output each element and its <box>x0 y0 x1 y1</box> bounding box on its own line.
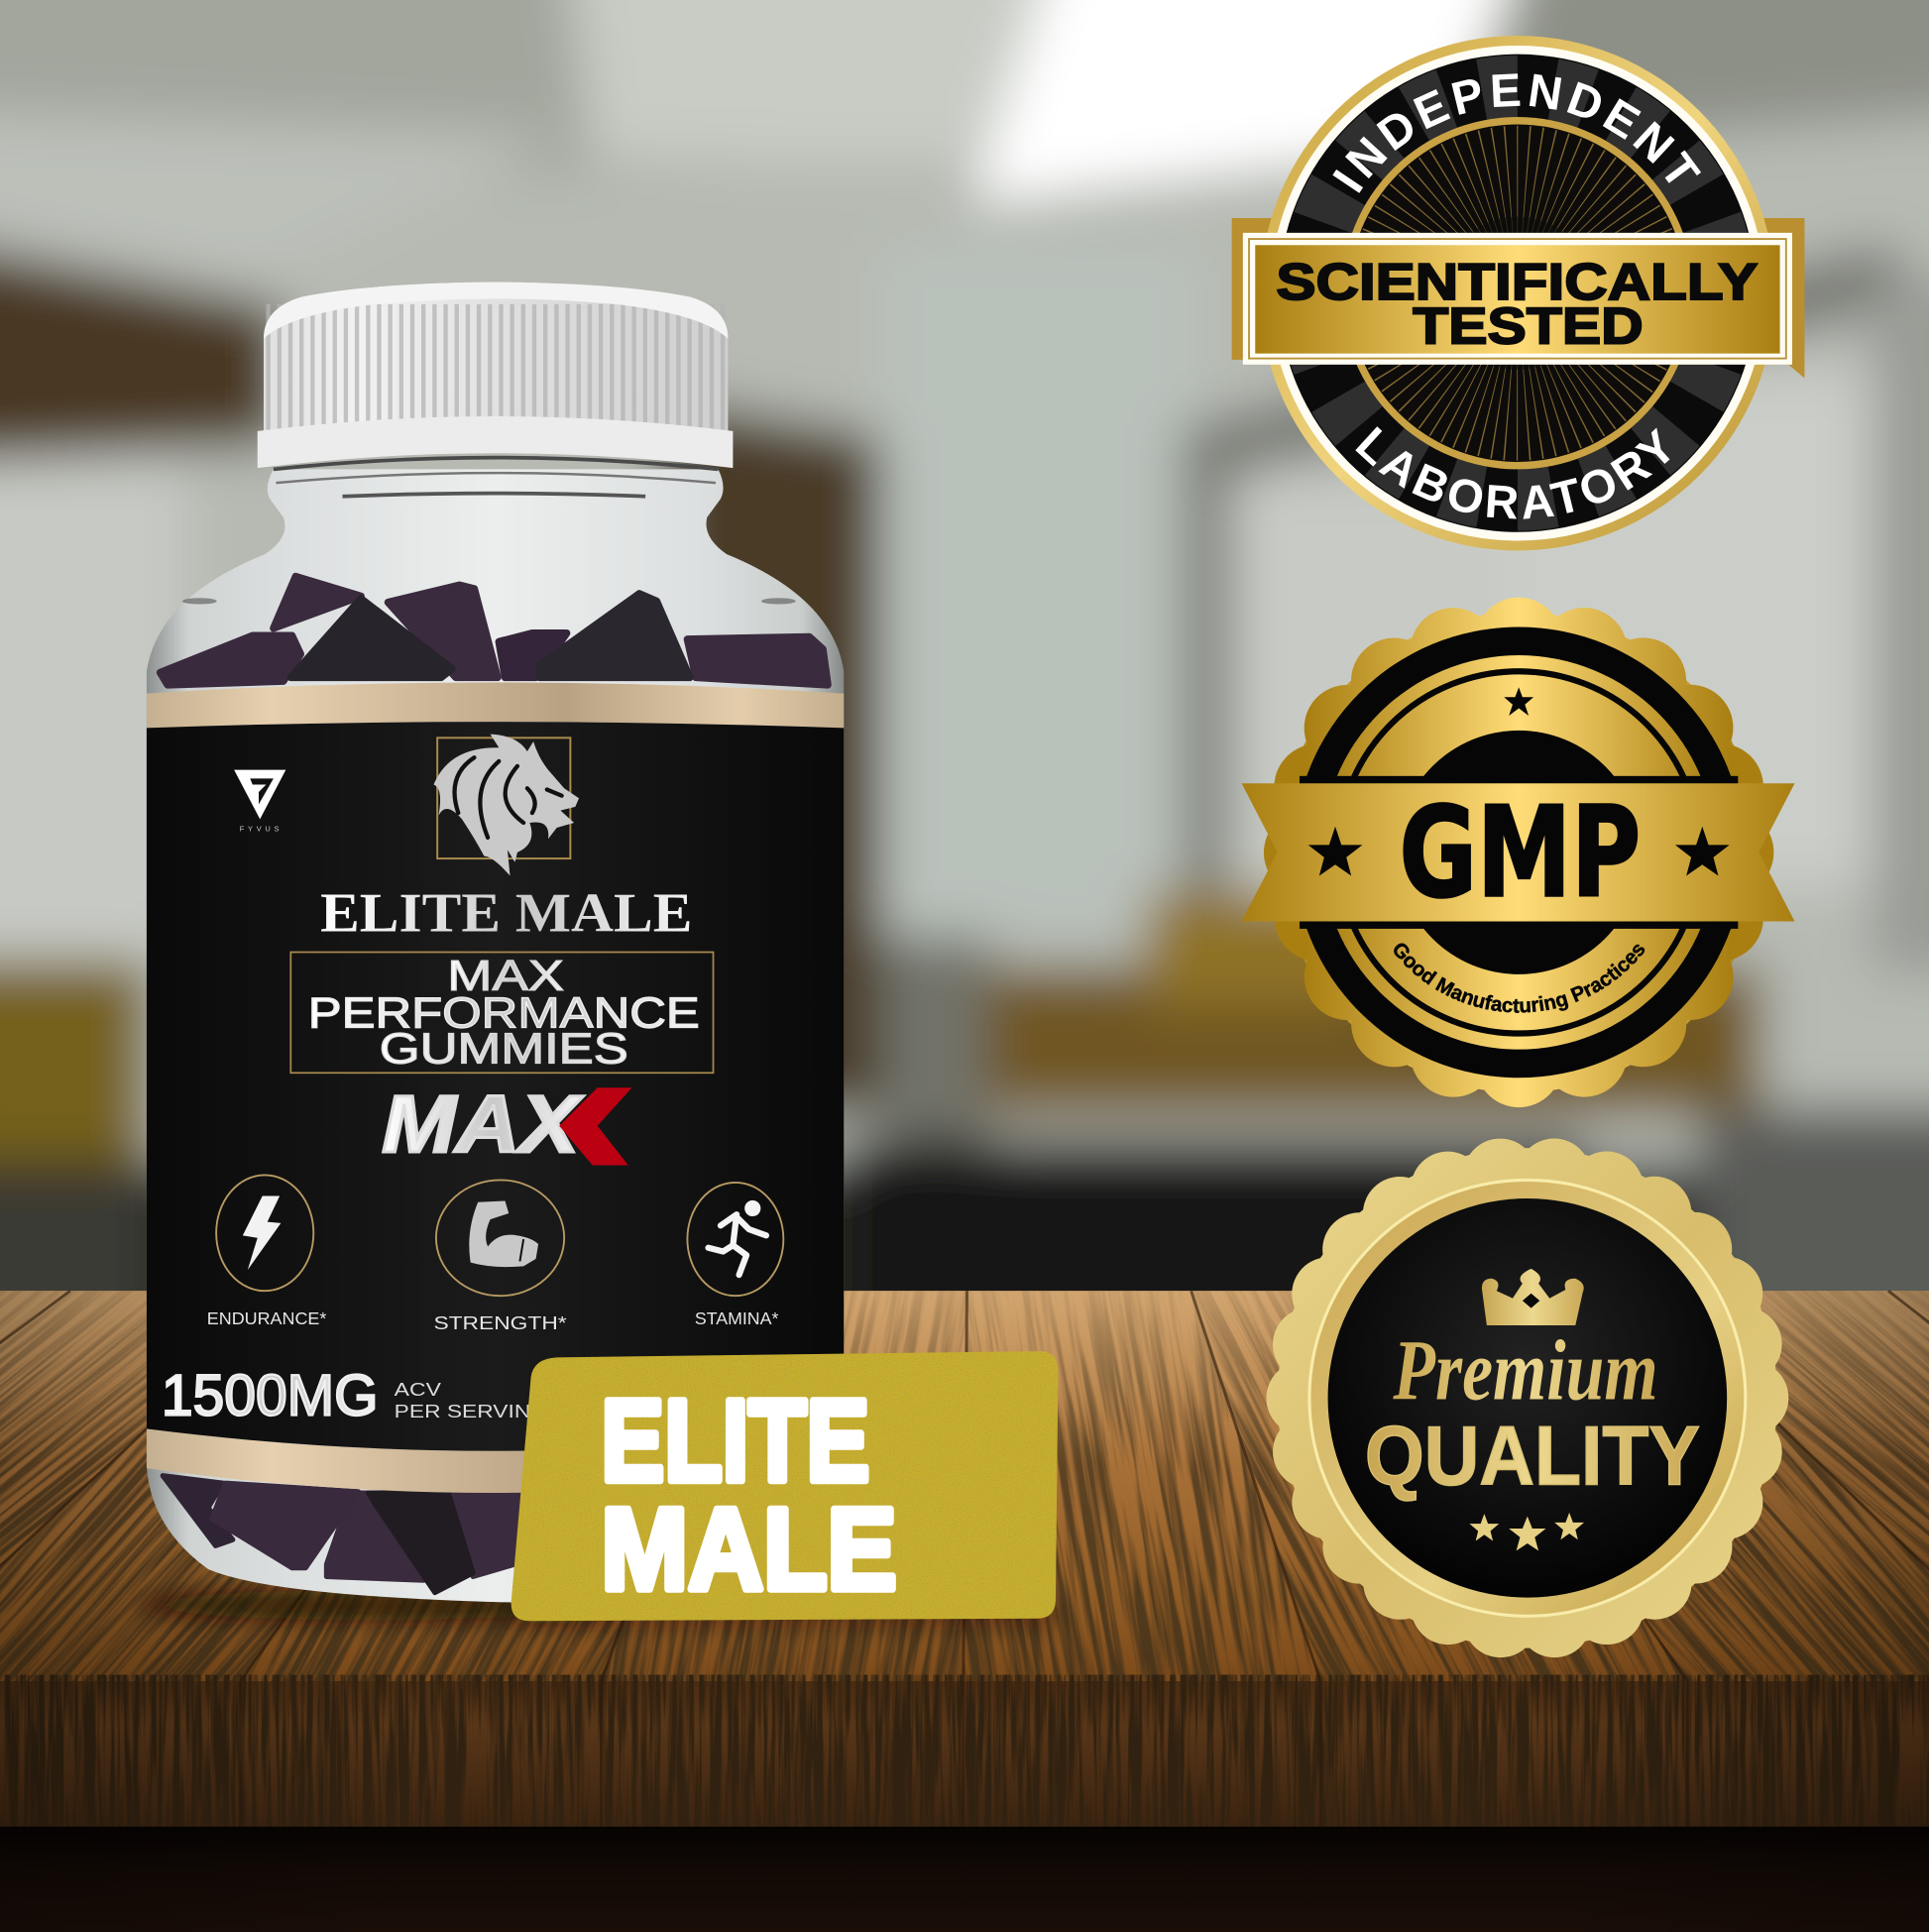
Premium script: Premium <box>1393 1322 1658 1419</box>
table front edge <box>0 1681 1929 1827</box>
GMP text: GMP <box>1400 780 1641 925</box>
QUALITY: QUALITY <box>1365 1409 1700 1502</box>
dosage detail: PER SERVING <box>395 1401 548 1421</box>
product subtitle box: PERFORMANCE <box>308 989 700 1037</box>
icon: strength <box>436 1180 564 1296</box>
inner sunburst <box>1341 117 1694 469</box>
cap band <box>258 416 733 468</box>
black label <box>147 722 844 1451</box>
scalloped seal <box>1278 1148 1777 1648</box>
product name: ELITE MALE <box>320 882 692 944</box>
cap ribs <box>266 316 727 417</box>
cap dome <box>264 283 728 339</box>
blurred room background <box>0 0 1929 1361</box>
label: endurance: ENDURANCE* <box>207 1308 327 1328</box>
wood grain on planks <box>0 1291 1929 1681</box>
INDEPENDENT arc text: INDEPENDENT <box>1332 73 1701 193</box>
icon: endurance <box>216 1175 313 1291</box>
neck rings <box>274 458 718 497</box>
dosage detail <box>395 1379 548 1421</box>
table top planks <box>0 1291 1929 1681</box>
banner tails <box>1232 218 1804 378</box>
gold tag: Elite Male: MALE <box>601 1484 897 1614</box>
scalloped seal <box>1279 613 1759 1092</box>
icon: FYVUS logo: FYVUS <box>240 825 283 834</box>
label: stamina: STAMINA* <box>695 1308 779 1328</box>
badge: premium quality <box>1278 1148 1777 1648</box>
icon: lion logo <box>433 735 579 875</box>
shadow under bottle and tag <box>136 1590 1060 1624</box>
product subtitle box: GUMMIES <box>380 1025 628 1073</box>
gold tag: Elite Male <box>511 1351 1058 1621</box>
dosage detail: ACV <box>395 1379 442 1400</box>
ribbon stars <box>1308 827 1362 875</box>
stars <box>1469 1513 1584 1550</box>
banner <box>1243 233 1792 365</box>
black ring with segments <box>1279 55 1757 532</box>
table base shadow <box>0 1827 1929 1932</box>
gummies top <box>161 577 828 685</box>
product subtitle box: MAX <box>447 953 564 1000</box>
MAX logo: MAX <box>382 1080 584 1170</box>
plank seams <box>0 1291 1929 1827</box>
shoulder reflections <box>182 598 796 604</box>
cap skirt <box>264 283 728 433</box>
wooden table <box>0 1291 1929 1932</box>
icon: FYVUS logo <box>234 770 285 834</box>
badge: GMP <box>1241 597 1794 1108</box>
gummies bottom <box>163 1476 521 1593</box>
icon: crown <box>1482 1269 1584 1325</box>
icon: stamina <box>687 1183 783 1296</box>
banner text: SCIENTIFICALLY <box>1276 254 1758 311</box>
label: strength: STRENGTH* <box>433 1312 567 1333</box>
badge: scientifically tested: TESTED <box>1413 298 1644 356</box>
glass jar <box>147 469 844 1603</box>
badge: scientifically tested <box>1231 36 1804 551</box>
black rings <box>1294 626 1745 1078</box>
product subtitle box <box>290 953 714 1073</box>
dosage 1500MG: 1500MG <box>162 1364 379 1428</box>
beige band bottom <box>147 1428 844 1493</box>
gold rings <box>1309 1180 1746 1616</box>
top star <box>1504 687 1533 716</box>
tag text: ELITE <box>601 1376 869 1506</box>
good manufacturing practices arc text: Good Manufacturing Practices <box>1394 944 1645 1013</box>
beige band top <box>147 682 844 728</box>
ribbon <box>1300 776 1738 929</box>
LABORATORY arc text: LABORATORY <box>1355 426 1669 519</box>
outer gold ring <box>1260 36 1775 550</box>
product bottle <box>147 283 844 1603</box>
pale back edge of table <box>0 1291 1929 1681</box>
black disc <box>1328 1198 1727 1598</box>
